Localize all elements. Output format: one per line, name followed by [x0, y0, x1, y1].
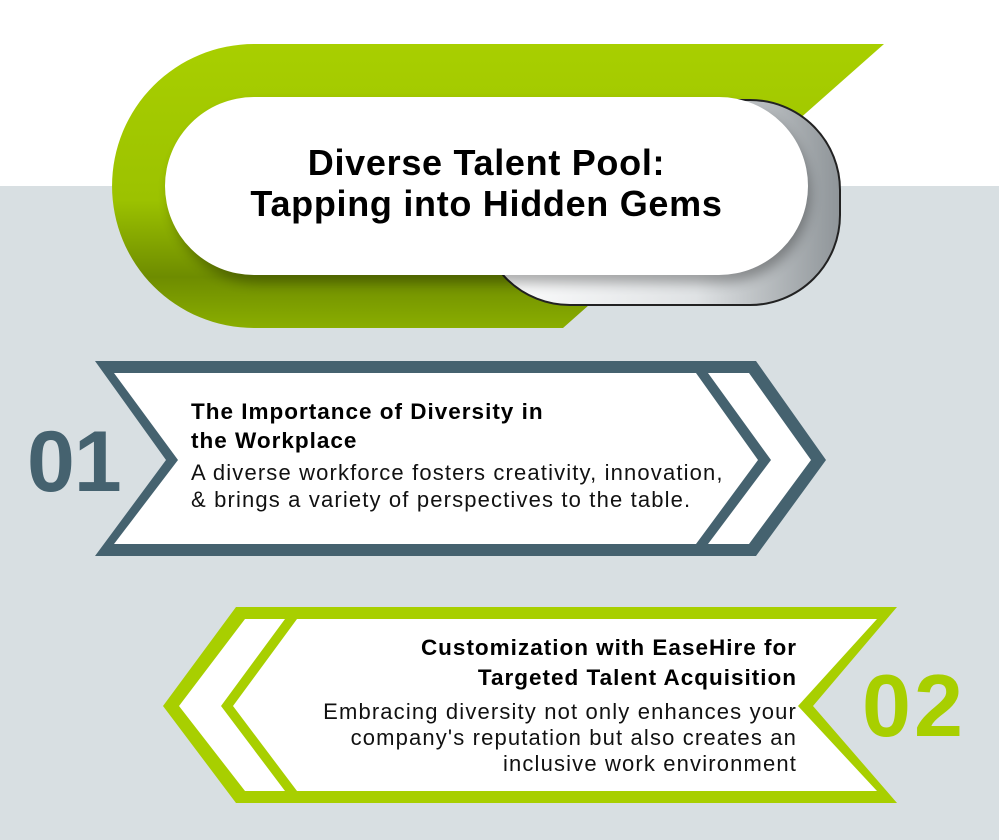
text block 2: Targeted Talent Acquisition [478, 665, 797, 690]
text block 1: the Workplace [191, 428, 357, 453]
text block 2: Customization with EaseHire for [421, 635, 797, 660]
title [250, 142, 723, 224]
arrow 2 [163, 607, 897, 803]
text block 1 [191, 399, 724, 512]
text block 2 [323, 635, 797, 776]
text block 1: A diverse workforce fosters creativity, innovation, [191, 460, 724, 485]
text block 1: & brings a variety of perspectives to the table. [191, 487, 691, 512]
title: Tapping into Hidden Gems [250, 183, 723, 224]
title pill [165, 97, 808, 275]
title: Diverse Talent Pool: [308, 142, 665, 183]
text block 2: Embracing diversity not only enhances your [323, 699, 797, 724]
text block 2: inclusive work environment [503, 751, 797, 776]
text block 2: company's reputation but also creates an [351, 725, 797, 750]
arrow 1 [95, 361, 826, 556]
shadow block [480, 100, 840, 305]
number 02: 02 [862, 656, 966, 755]
text block 1: The Importance of Diversity in [191, 399, 544, 424]
green banner shape [112, 44, 884, 328]
number 01: 01 [27, 414, 121, 510]
